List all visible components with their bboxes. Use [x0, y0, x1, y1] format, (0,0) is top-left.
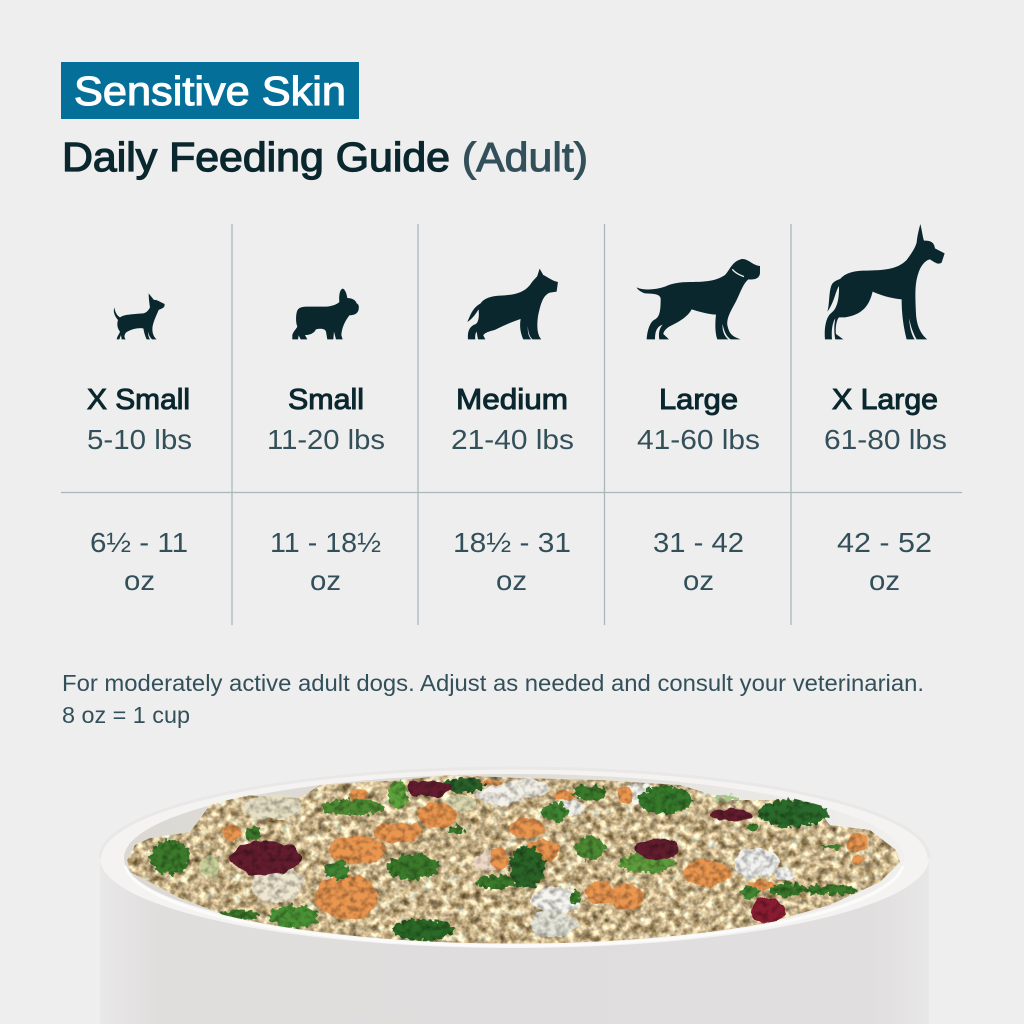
label: X Large: X Large	[832, 384, 938, 416]
quinoa base	[127, 775, 900, 945]
bowl body	[100, 768, 929, 1024]
column: Small	[267, 289, 385, 596]
weight: 5-10 lbs: 5-10 lbs	[87, 424, 192, 455]
icon: medium dog	[467, 269, 558, 339]
heading block	[61, 62, 588, 180]
footnote	[62, 670, 924, 728]
column: Large	[637, 259, 760, 596]
column: X Large	[824, 224, 947, 596]
amount: 6½ - 11 oz	[90, 527, 188, 596]
badge: Sensitive Skin	[61, 62, 359, 119]
amount: 6½ - 11 oz: oz	[124, 565, 155, 596]
column: Medium	[451, 269, 574, 596]
footnote: For moderately active adult dogs. Adjust as needed and consult your veterinarian.	[62, 670, 924, 696]
amount: 11 - 18½ oz	[270, 527, 381, 596]
label: Small: Small	[288, 384, 364, 416]
amount: 11 - 18½ oz: 11 - 18½	[270, 527, 381, 558]
amount: 11 - 18½ oz: oz	[310, 565, 341, 596]
surface shading	[120, 770, 910, 950]
kale	[150, 777, 857, 941]
amount: 31 - 42 oz: oz	[683, 565, 714, 596]
food	[120, 770, 910, 950]
weight: 11-20 lbs: 11-20 lbs	[267, 424, 385, 455]
title: Daily Feeding Guide (Adult)	[62, 134, 588, 180]
amount: 42 - 52 oz	[837, 527, 932, 596]
amount: 31 - 42 oz: 31 - 42	[653, 527, 744, 558]
front lip highlight	[125, 866, 903, 946]
amount: 42 - 52 oz: 42 - 52	[837, 527, 932, 558]
label: X Small: X Small	[87, 384, 190, 416]
icon: x small dog	[114, 293, 165, 339]
weight: 61-80 lbs: 61-80 lbs	[824, 424, 947, 455]
weight: 41-60 lbs: 41-60 lbs	[637, 424, 760, 455]
column: X Small	[87, 293, 192, 596]
table grid lines	[61, 224, 962, 625]
weight: 21-40 lbs: 21-40 lbs	[451, 424, 574, 455]
label: Medium: Medium	[456, 384, 568, 416]
label: Large: Large	[659, 384, 738, 416]
icon: x large dog	[825, 224, 945, 339]
amount: 18½ - 31 oz	[453, 527, 571, 596]
bowl of food	[100, 768, 929, 1024]
footnote: 8 oz = 1 cup	[62, 702, 190, 728]
amount: 18½ - 31 oz: oz	[496, 565, 527, 596]
amount: 42 - 52 oz: oz	[869, 565, 900, 596]
badge: Sensitive Skin: Sensitive Skin	[74, 68, 346, 114]
kidney beans	[231, 779, 785, 922]
amount: 18½ - 31 oz: 18½ - 31	[453, 527, 571, 558]
pale pieces	[200, 779, 795, 938]
amount: 31 - 42 oz	[653, 527, 744, 596]
sweet potato	[223, 780, 867, 919]
icon: small dog	[292, 289, 359, 339]
icon: large dog	[637, 259, 760, 339]
amount: 6½ - 11 oz: 6½ - 11	[90, 527, 188, 558]
